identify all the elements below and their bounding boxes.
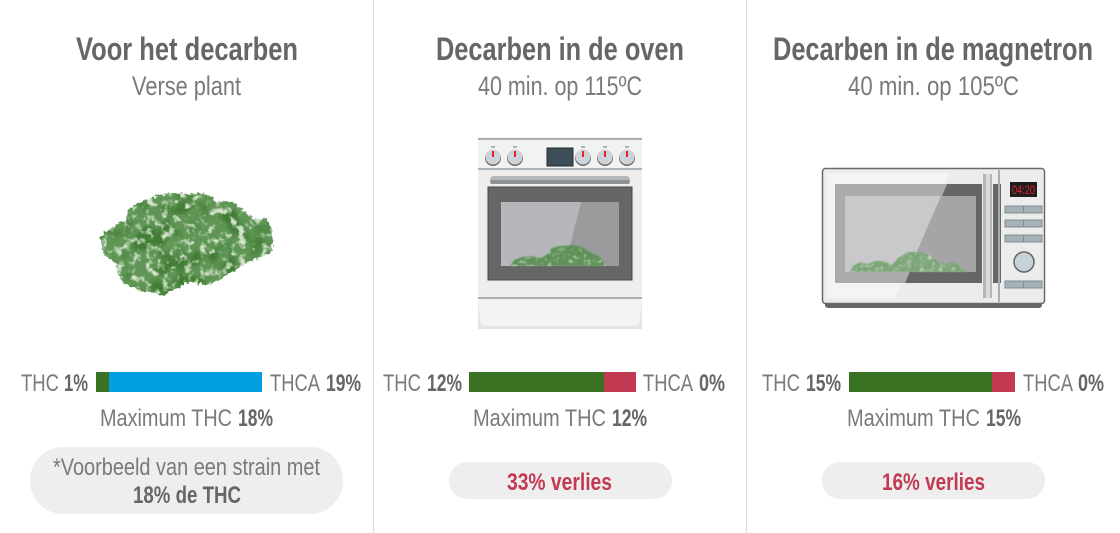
bar label: thc 15% [762, 370, 841, 397]
bar label: thca 0%: THCA [1023, 370, 1073, 397]
stacked bar: thc and loss [849, 372, 1015, 392]
maximum thc 18%: 18% [238, 405, 273, 432]
heading: voor het decarben: Voor het decarben [76, 31, 298, 67]
maximum thc 15%: 15% [986, 405, 1021, 432]
subheading: verse plant: Verse plant [132, 71, 241, 101]
bar label: thca 19%: 19% [326, 370, 361, 397]
bar label: thc 1%: THC [21, 370, 59, 397]
icon: microwave with plant: 04:20 [1012, 183, 1035, 197]
icon: oven with plant [478, 137, 642, 329]
callout: 33% loss [449, 462, 672, 499]
bar label: thc 12% [383, 370, 462, 397]
callout: example strain: 18% de THC [133, 482, 241, 509]
bar label: thc 1%: 1% [64, 370, 88, 397]
callout: example strain [30, 447, 343, 514]
bar label: thc 12%: THC [383, 370, 421, 397]
icon: microwave with plant [822, 168, 1044, 308]
bar label: thca 19%: THCA [270, 370, 320, 397]
callout: 16% loss [822, 462, 1045, 499]
maximum thc 18%: Maximum THC [100, 405, 232, 432]
stacked bar: thc and thca [96, 372, 262, 392]
maximum thc 12%: 12% [612, 405, 647, 432]
panel: decarben in de oven [383, 31, 725, 499]
callout: 33% loss: 33% verlies [507, 469, 612, 496]
subheading: microwave time and temperature: 40 min. op 105ºC [848, 71, 1019, 101]
bar label: thca 0%: THCA [643, 370, 693, 397]
callout: 16% loss: 16% verlies [882, 469, 985, 496]
callout: example strain: *Voorbeeld van een strain met [53, 454, 320, 481]
bar label: thca 0%: 0% [699, 370, 725, 397]
bar label: thc 15%: THC [762, 370, 800, 397]
icon: fresh cannabis plant [100, 193, 273, 295]
stacked bar: thc and loss [469, 372, 636, 392]
maximum thc 15%: Maximum THC [847, 405, 980, 432]
bar label: thc 12%: 12% [427, 370, 462, 397]
heading: decarben in de oven: Decarben in de oven [436, 31, 684, 67]
bar label: thca 0%: 0% [1078, 370, 1104, 397]
subheading: oven time and temperature: 40 min. op 115ºC [478, 71, 642, 101]
panel: voor het decarben [21, 31, 361, 514]
bar label: thc 15%: 15% [806, 370, 841, 397]
maximum thc 12%: Maximum THC [473, 405, 606, 432]
panel: decarben in de magnetron [762, 31, 1104, 499]
